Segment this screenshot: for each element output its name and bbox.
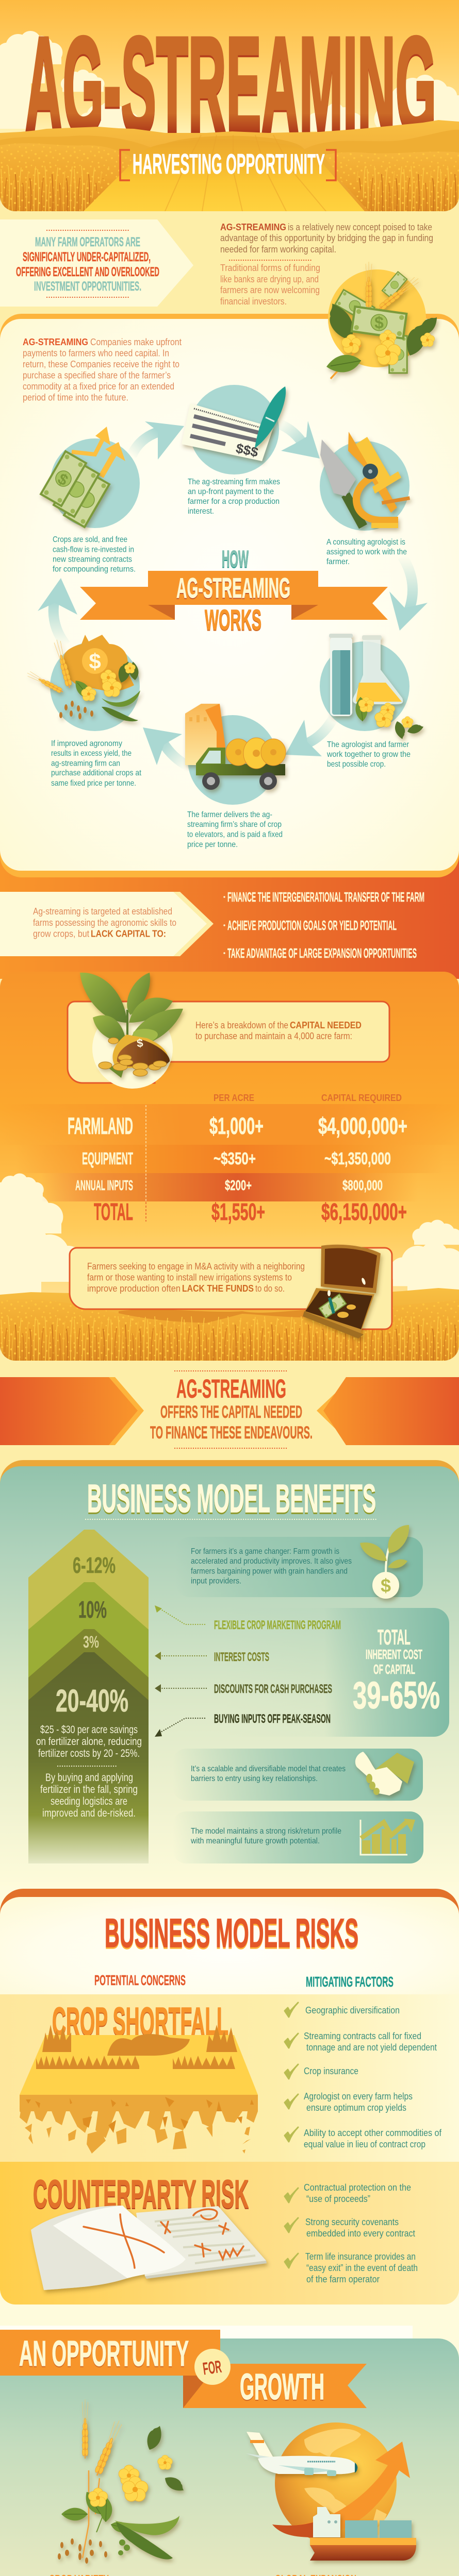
text: offer: OFFERS THE CAPITAL NEEDED (160, 1402, 302, 1422)
row: equipment (82, 1149, 391, 1168)
arrow: check to microscope (277, 421, 320, 459)
list: counterparty mitigation: “easy exit” in the event of death (306, 2263, 418, 2273)
text: consulting agrologist: assigned to work with the (326, 548, 407, 556)
icon: plant with money bag: $ (136, 1037, 144, 1050)
text: crops are sold: for compounding returns. (53, 565, 136, 574)
table: capital required (0, 1093, 459, 1225)
text: companies make upfront payments: AG-STREAMING (23, 337, 88, 347)
text: savings: fertilizer costs by 20 - 25%. (38, 1748, 140, 1759)
column heading: mitigating factors: MITIGATING FACTORS (306, 1974, 394, 1990)
list: crop shortfall mitigation: equal value in lieu of contract crop (304, 2139, 425, 2149)
panel: scalable model: barriers to entry using key relationships. (191, 1774, 318, 1783)
text: up-front payment (188, 478, 280, 516)
panel: business model risks (0, 1889, 459, 2009)
clouds (0, 31, 459, 134)
icon: harvest crops with dollar: $ (89, 649, 101, 673)
panel: growth section (0, 2326, 459, 2576)
label: discounts for cash purchases: DISCOUNTS FOR CASH PURCHASES (214, 1682, 332, 1696)
text: fertilizer logistics: improved and de-risked. (42, 1807, 136, 1819)
callout: M&A funding (70, 1248, 392, 1329)
text: consulting agrologist: A consulting agrologist is (326, 538, 405, 547)
text: farmer delivers: streaming firm’s share of crop (187, 820, 282, 829)
text: savings: $25 - $30 per acre savings (40, 1724, 138, 1736)
heading: counterparty risk: COUNTERPARTY RISK (33, 2172, 249, 2216)
row: annual inputs: $800,000 (342, 1177, 383, 1193)
text: fertilizer logistics: By buying and applying (45, 1772, 133, 1784)
text: crops are sold: cash-flow is re-invested in (53, 545, 134, 554)
heading: how ag-streaming works: AG-STREAMING (176, 572, 290, 604)
text: up-front payment: farmer for a crop production (188, 497, 280, 506)
text: agrologist and farmer (326, 740, 411, 769)
row: farmland (68, 1113, 407, 1139)
text: up-front payment: an up-front payment to the (188, 487, 274, 496)
intro heading (16, 235, 159, 294)
label: buying inputs off peak-season: BUYING INPUTS OFF PEAK-SEASON (214, 1712, 331, 1726)
row: farmland: $4,000,000+ (318, 1113, 407, 1139)
text: breakdown intro (195, 1020, 362, 1041)
text: M&A activity: farm or those wanting to install new irrigations systems to (87, 1273, 292, 1283)
text: farmer delivers: price per tonne. (187, 840, 238, 849)
arrow: tubes to truck (285, 718, 334, 756)
text: agrologist and farmer: best possible crop. (327, 760, 386, 769)
panel: capital needed (0, 972, 459, 1362)
text: traditional funding: financial investors. (220, 296, 287, 307)
icon: growth chart (360, 1819, 415, 1855)
icon: money with growth arrows: $ (55, 470, 71, 489)
label: interest costs (155, 1650, 269, 1664)
text: M&A activity: improve production often (87, 1283, 181, 1294)
text: companies make upfront payments: purchase a specified share of the farmer’s (23, 370, 171, 380)
list: counterparty mitigation (285, 2182, 418, 2284)
row: annual inputs: ANNUAL INPUTS (75, 1177, 133, 1193)
row: annual inputs: $200+ (225, 1177, 252, 1193)
text: up-front payment: interest. (188, 507, 214, 516)
arrow: microscope to tubes (389, 556, 428, 631)
panel: total inherent cost of capital (222, 1608, 449, 1737)
icon: harvest crops with dollar (26, 635, 140, 731)
text: total: TOTAL (378, 1625, 411, 1649)
ship (310, 2507, 416, 2561)
text: companies make upfront payments: commodity at a fixed price for an extended (23, 381, 174, 392)
list: counterparty mitigation: Term life insurance provides an (305, 2251, 416, 2262)
text: excess yield: results in excess yield, the (51, 749, 132, 758)
clouds (0, 1174, 459, 1298)
text: ag-streaming concept (220, 222, 433, 255)
label: buying inputs off peak-season (155, 1712, 331, 1737)
column headers: PER ACRE (214, 1093, 254, 1103)
label: flexible crop marketing (155, 1605, 341, 1632)
panel: risk return (173, 1811, 423, 1863)
callout: target farmers: grow crops, but (33, 928, 89, 939)
callout: target farmers: Ag-streaming is targeted at established (33, 906, 172, 917)
text: excess yield: purchase additional crops at (51, 769, 141, 777)
panel: scalable model: It’s a scalable and diversifiable model that creates (191, 1765, 346, 1773)
row: farmland: $1,000+ (209, 1113, 264, 1139)
list: counterparty mitigation: Contractual protection on the (304, 2182, 411, 2193)
label: interest costs: INTEREST COSTS (214, 1650, 269, 1664)
panel: crop shortfall: CROP SHORTFALL (52, 1999, 228, 2044)
label: flexible crop marketing: FLEXIBLE CROP MARKETING PROGRAM (214, 1618, 341, 1632)
page background: lower cream (0, 1886, 459, 2576)
text: consulting agrologist (326, 538, 407, 566)
plane (246, 2432, 357, 2476)
icon: coin sprout: $ (381, 1575, 391, 1596)
text: total: OF CAPITAL (373, 1662, 415, 1677)
list: crop shortfall mitigation: Geographic diversification (305, 2005, 400, 2015)
panel: risk return: with meaningful future growth potential. (190, 1837, 320, 1845)
list: counterparty mitigation: Strong security covenants (305, 2217, 399, 2227)
column headers (214, 1093, 402, 1103)
row: total: $6,150,000+ (321, 1198, 407, 1225)
text: M&A activity: to do so. (255, 1283, 285, 1294)
icon: open treasure chest (303, 1245, 381, 1338)
icon: crop variety bouquet (58, 2399, 187, 2564)
list: counterparty mitigation: embedded into every contract (306, 2228, 415, 2239)
panel: game changer: farmers bargaining power with grain handlers and (191, 1567, 348, 1575)
icon: cheque and pen (182, 385, 286, 474)
panel: risk return: The model maintains a strong risk/return profile (191, 1827, 341, 1836)
icon: money with growth arrows (39, 427, 140, 529)
value: 10%: 10% (78, 1596, 107, 1623)
banner: an opportunity for growth (0, 2330, 367, 2408)
callout: target farmers: farms possessing the agronomic skills to (33, 918, 176, 928)
text: agrologist and farmer: The agrologist and farmer (327, 740, 409, 749)
panel: game changer (175, 1525, 423, 1599)
arrow: truck to crops (143, 727, 188, 766)
list: crop shortfall mitigation: Ability to accept other commodities of (304, 2128, 442, 2138)
panel: scalable model (173, 1749, 423, 1801)
text: M&A activity: Farmers seeking to engage in M&A activity with a neighboring (87, 1261, 305, 1272)
panel: crop shortfall (0, 1994, 459, 2162)
text: crops are sold (53, 535, 136, 574)
subtitle brackets (120, 150, 336, 180)
text: savings (36, 1724, 142, 1759)
text: fertilizer logistics: fertilizer in the fall, spring (40, 1784, 138, 1795)
label: discounts for cash purchases (155, 1682, 332, 1696)
list: crop shortfall mitigation: Streaming contracts call for fixed (304, 2031, 421, 2041)
heading: how ag-streaming works: WORKS (205, 603, 261, 636)
callout: capital breakdown (68, 1002, 389, 1083)
panel: orange target farms band (0, 855, 459, 979)
illustration: marked-up contract (31, 2206, 267, 2290)
icon: globe with plane, arrow and ship (246, 2422, 416, 2561)
text: excess yield: If improved agronomy (51, 739, 122, 748)
text: offer: AG-STREAMING (176, 1374, 286, 1403)
text: ag-streaming concept: advantage of this opportunity by bridging the gap in funding (220, 233, 433, 243)
text: companies make upfront payments (23, 337, 182, 403)
row: annual inputs (75, 1177, 383, 1193)
text: traditional funding: Traditional forms of funding (220, 263, 320, 273)
panel: how ag-streaming works (0, 314, 459, 877)
text: fertilizer logistics (40, 1772, 138, 1819)
heading: how ag-streaming works: HOW (222, 546, 249, 572)
panel: counterparty risk (0, 2162, 459, 2304)
icon: coin sprout (360, 1525, 409, 1599)
text: total (353, 1625, 440, 1717)
text: farmer delivers: The farmer delivers the ag- (187, 810, 272, 819)
row: total: TOTAL (94, 1198, 133, 1225)
intro heading: OFFERING EXCELLENT AND OVERLOOKED (16, 265, 159, 279)
text: traditional funding (220, 263, 320, 307)
banner: capital offer (0, 1371, 459, 1448)
chart: layered cost arrow (28, 1530, 149, 1863)
icon: money wheat and flowers (322, 262, 440, 379)
text: breakdown intro: CAPITAL NEEDED (290, 1020, 362, 1030)
text: M&A activity (87, 1261, 305, 1294)
list: counterparty mitigation: “use of proceeds” (306, 2194, 370, 2204)
list: crop shortfall mitigation: Crop insurance (304, 2066, 358, 2076)
column headers: CAPITAL REQUIRED (321, 1093, 402, 1103)
intro heading: INVESTMENT OPPORTUNITIES. (34, 279, 141, 294)
text: agrologist and farmer: work together to grow the (326, 750, 411, 759)
row: equipment: EQUIPMENT (82, 1149, 133, 1168)
text: breakdown intro: Here’s a breakdown of the (195, 1020, 288, 1030)
text: traditional funding: like banks are drying up, and (220, 274, 319, 284)
panel: header landscape (0, 0, 459, 211)
heading: how ag-streaming works (80, 546, 388, 636)
text: companies make upfront payments: period of time into the future. (23, 393, 128, 403)
row: equipment: ~$1,350,000 (324, 1149, 391, 1168)
text: companies make upfront payments: return, these Companies receive the right to (23, 359, 179, 369)
list: capital uses (223, 889, 424, 961)
text: crops are sold: Crops are sold, and free (53, 535, 127, 544)
row: total (94, 1198, 407, 1225)
panel: business model benefits (0, 1460, 459, 1886)
row: equipment: ~$350+ (214, 1149, 256, 1168)
heading: an opportunity: AN OPPORTUNITY (19, 2333, 189, 2374)
list: counterparty mitigation: of the farm operator (306, 2274, 380, 2284)
icon: test tubes and flask (320, 634, 424, 740)
text: excess yield: same fixed price per tonne. (51, 779, 136, 788)
hills and crop field (0, 120, 459, 211)
road (84, 135, 365, 211)
text: excess yield: ag-streaming firm can (51, 759, 120, 768)
text: excess yield (51, 739, 141, 788)
intro heading: SIGNIFICANTLY UNDER-CAPITALIZED, (23, 250, 151, 264)
list: crop shortfall mitigation: ensure optimum crop yields (306, 2103, 406, 2113)
icon: grain elevator and truck (185, 704, 286, 805)
panel: intro callout (0, 219, 193, 307)
row: total: $1,550+ (211, 1198, 265, 1225)
text: M&A activity: LACK THE FUNDS (182, 1283, 254, 1294)
icon: cheque and pen: $$$ (235, 440, 260, 460)
text: savings: on fertilizer alone, reducing (36, 1736, 142, 1748)
text: farmer delivers (187, 810, 283, 849)
row: farmland: FARMLAND (68, 1113, 133, 1139)
text: ag-streaming concept: is a relatively new concept poised to take (288, 222, 432, 232)
text: fertilizer logistics: seeding logistics are (51, 1795, 127, 1807)
arrow: money to check (132, 421, 184, 460)
arrow: growth (272, 2442, 410, 2535)
intro heading: MANY FARM OPERATORS ARE (35, 235, 140, 249)
text: up-front payment: The ag-streaming firm makes (188, 478, 280, 486)
callout: target farmers: LACK CAPITAL TO: (91, 928, 166, 939)
icon: money wheat and flowers: $ (374, 313, 384, 332)
value: 3%: 3% (83, 1633, 99, 1651)
column heading: potential concerns: POTENTIAL CONCERNS (94, 1972, 186, 1988)
list: crop shortfall mitigation (285, 2003, 442, 2149)
arrow: crops to money (38, 578, 77, 645)
icon: shovel and microscope (320, 432, 410, 531)
badge: for: FOR (202, 2357, 223, 2379)
text: breakdown intro: to purchase and maintain a 4,000 acre farm: (195, 1031, 352, 1041)
text: offer (150, 1374, 313, 1443)
text: farmer delivers: to elevators, and is paid a fixed (187, 831, 283, 839)
panel: game changer: accelerated and productivity improves. It also gives (191, 1557, 352, 1566)
text: ag-streaming concept: needed for farm working capital. (220, 244, 336, 255)
list: crop shortfall mitigation: Agrologist on every farm helps (304, 2091, 413, 2102)
badge: for (194, 2349, 231, 2385)
value: 20-40%: 20-40% (56, 1683, 128, 1718)
field (0, 1288, 459, 1362)
panel: game changer: input providers. (191, 1577, 241, 1586)
callout: target farmers (0, 892, 214, 956)
panel: game changer: For farmers it’s a game changer: Farm growth is (191, 1547, 339, 1556)
text: ag-streaming concept: AG-STREAMING (220, 222, 286, 232)
icon: handshake (355, 1752, 414, 1795)
heading: growth: GROWTH (240, 2367, 324, 2408)
text: companies make upfront payments: Companies make upfront (90, 337, 182, 347)
text: crops are sold: new streaming contracts (53, 555, 132, 564)
text: consulting agrologist: farmer. (326, 557, 350, 566)
text: companies make upfront payments: payments to farmers who need capital. In (23, 348, 169, 359)
value: 6-12%: 6-12% (73, 1553, 116, 1578)
icon: plant with money bag (80, 973, 183, 1089)
text: offer: TO FINANCE THESE ENDEAVOURS. (150, 1423, 313, 1443)
list: crop shortfall mitigation: tonnage and are not yield dependent (306, 2042, 437, 2053)
illustration: dry ground (20, 2025, 258, 2154)
ribbon (80, 571, 388, 620)
text: traditional funding: farmers are now welcoming (220, 285, 320, 295)
